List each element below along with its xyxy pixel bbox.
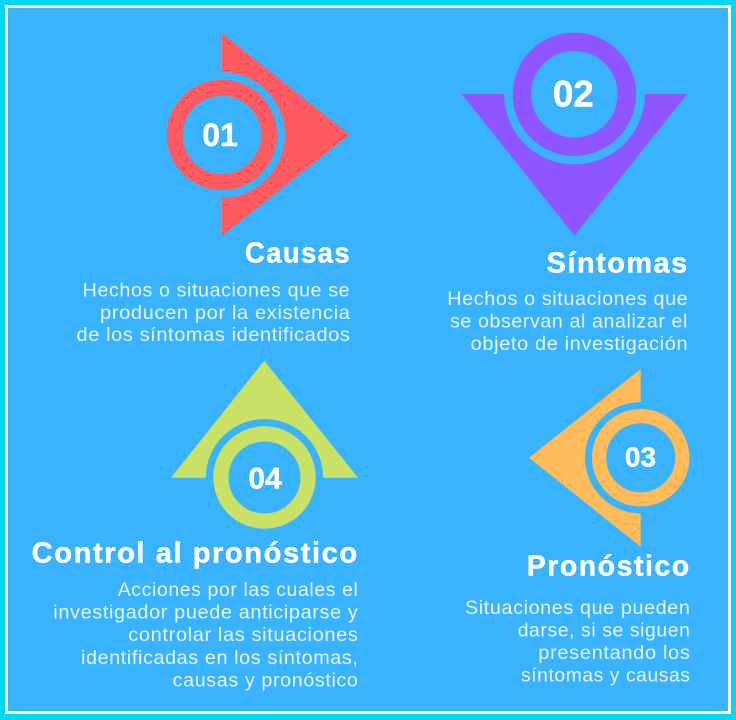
- panel: causas: [76, 33, 351, 346]
- icon: green arrow with number 04: 04: [248, 462, 282, 495]
- text block: pronóstico: darse, si se siguen: [518, 620, 690, 642]
- panel: síntomas: [447, 42, 689, 355]
- text block: control al pronóstico: causas y pronóstico: [173, 670, 358, 692]
- text block: pronóstico: Situaciones que pueden: [465, 597, 690, 619]
- icon: purple arrow with number 02: 02: [553, 74, 594, 115]
- heading: causas: Causas: [245, 237, 351, 269]
- text block: control al pronóstico: Acciones por las cuales el: [118, 579, 358, 601]
- text block: pronóstico: [465, 597, 690, 687]
- text block: control al pronóstico: [53, 579, 359, 692]
- icon: orange arrow with number 03: 03: [625, 442, 656, 473]
- text block: síntomas: objeto de investigación: [471, 333, 688, 355]
- text block: síntomas: [447, 288, 688, 355]
- icon: purple arrow with number 02: [462, 42, 687, 236]
- text block: causas: [76, 280, 350, 346]
- text block: causas: de los síntomas identificados: [76, 324, 350, 346]
- panel: pronóstico: [465, 369, 691, 687]
- icon: green arrow with number 04: [171, 361, 358, 521]
- icon: red arrow with number 01: [175, 33, 350, 236]
- panel: control al pronóstico: [32, 361, 359, 692]
- text block: control al pronóstico: investigador puede anticiparse y: [53, 601, 359, 623]
- text block: síntomas: Hechos o situaciones que: [447, 288, 688, 310]
- heading: síntomas: Síntomas: [547, 247, 689, 279]
- heading: pronóstico: Pronóstico: [527, 551, 691, 583]
- icon: orange arrow with number 03: [529, 369, 682, 547]
- text block: control al pronóstico: identificadas en los síntomas,: [81, 647, 358, 669]
- text block: causas: Hechos o situaciones que se: [83, 280, 350, 302]
- heading: control al pronóstico: Control al pronóstico: [32, 538, 359, 570]
- text block: síntomas: se observan al analizar el: [450, 311, 688, 333]
- text block: control al pronóstico: controlar las situaciones: [128, 624, 358, 646]
- text block: pronóstico: presentando los: [538, 642, 690, 664]
- text block: pronóstico: síntomas y causas: [521, 665, 690, 687]
- text block: causas: producen por la existencia: [100, 302, 350, 324]
- icon: red arrow with number 01: 01: [202, 117, 238, 153]
